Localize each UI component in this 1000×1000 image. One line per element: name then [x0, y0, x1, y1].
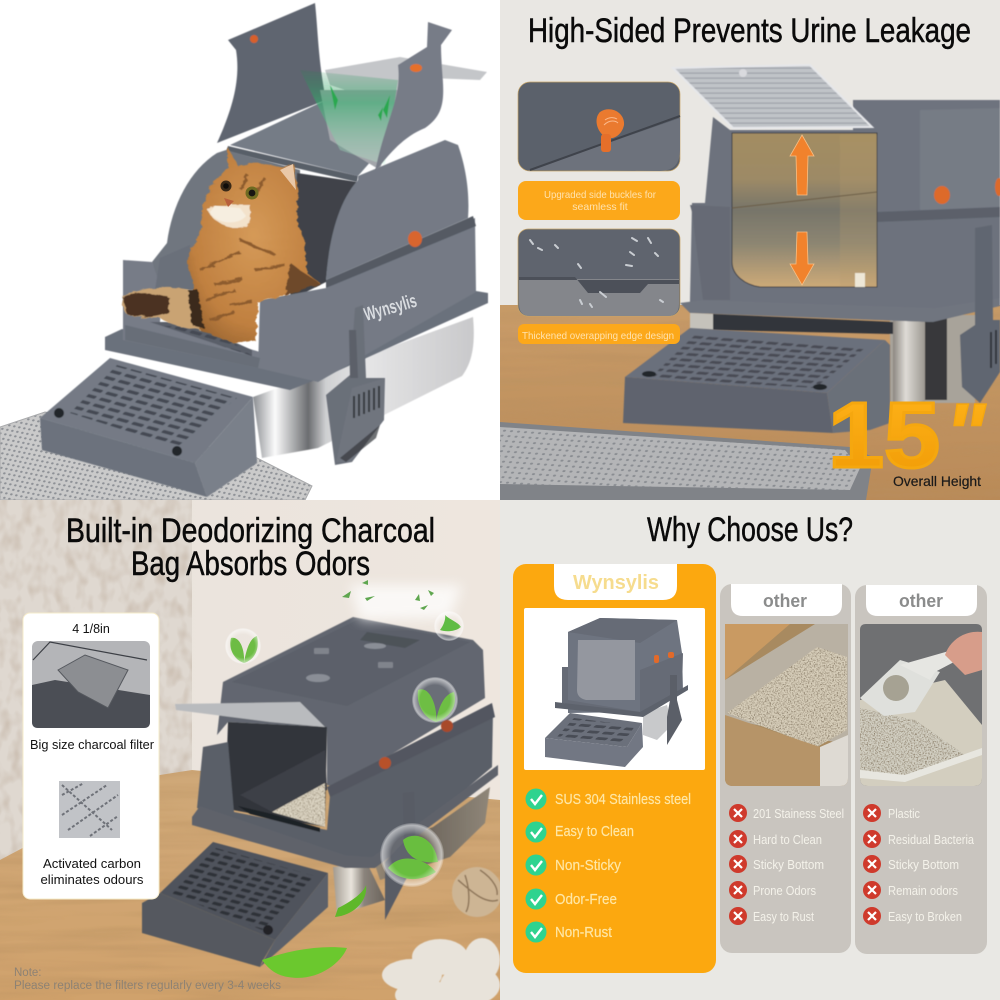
panel: product hero with cat — [0, 0, 500, 500]
height callout: " — [945, 387, 987, 482]
air rising from vent — [342, 580, 462, 620]
brand tab — [554, 564, 677, 600]
panel: why choose us — [500, 500, 1000, 1000]
orange label: side buckles: Upgraded side buckles for — [544, 189, 656, 201]
product photo — [524, 608, 705, 770]
benefit list: Non-Rust — [555, 925, 612, 941]
steel pan photo — [725, 624, 848, 786]
panel: deodorizing charcoal — [0, 500, 502, 1000]
brand name on box: Wynsylis — [362, 291, 419, 326]
height arrows — [790, 135, 814, 285]
tab — [866, 585, 977, 616]
carbon caption: Activated carbon — [43, 856, 141, 871]
carbon bag — [59, 781, 120, 838]
floor mat — [500, 422, 873, 500]
orange label: edge design — [518, 324, 680, 344]
heading — [66, 512, 435, 583]
covered litter box body — [105, 140, 488, 390]
heading: Bag Absorbs Odors — [131, 545, 370, 583]
open lid with wings — [217, 3, 487, 182]
card: Wynsylis — [513, 564, 716, 973]
orange label: side buckles — [518, 181, 680, 220]
plastic tray photo — [860, 624, 982, 786]
floor mat — [0, 412, 312, 500]
panel: high-sided prevents leakage — [500, 0, 1000, 500]
tab — [731, 584, 842, 616]
card: other 1 — [720, 584, 851, 953]
filter caption: Big size charcoal filter — [30, 737, 155, 752]
heading: Built-in Deodorizing Charcoal — [66, 512, 435, 550]
flaw list: Residual Bacteria — [888, 833, 974, 847]
height callout — [828, 383, 987, 489]
flaw list: 201 Stainess Steel — [753, 807, 844, 821]
flaw list — [729, 804, 844, 925]
brand tab: Wynsylis — [573, 572, 659, 594]
wood floor — [500, 305, 1000, 500]
tab: other — [899, 591, 943, 611]
pull-out entry step — [40, 358, 257, 497]
card: other 2 — [855, 585, 987, 954]
size label: 4 1/8in — [72, 622, 110, 636]
benefit list — [526, 788, 691, 942]
flaw list — [863, 804, 974, 925]
info card — [23, 613, 159, 899]
cat — [122, 147, 320, 343]
benefit list: SUS 304 Stainless steel — [555, 792, 691, 808]
detail card: side buckle — [518, 82, 680, 171]
height callout: Overall Height — [893, 473, 981, 489]
benefit list: Non-Sticky — [555, 858, 622, 874]
carbon caption: eliminates odours — [40, 872, 144, 887]
white flower rug — [382, 938, 500, 1000]
orange label: edge design: Thickened overapping edge design — [522, 330, 674, 342]
tab: other — [763, 591, 807, 611]
entry step — [623, 328, 890, 433]
flaw list: Sticky Bottom — [888, 858, 959, 872]
carbon caption — [40, 856, 144, 887]
flaw list: Sticky Bottom — [753, 858, 824, 872]
flaw list: Easy to Broken — [888, 910, 962, 924]
litter box front view — [680, 100, 1000, 403]
flaw list: Hard to Clean — [753, 833, 822, 847]
entry step — [142, 842, 328, 967]
note — [14, 967, 281, 992]
note: Note: — [14, 967, 42, 979]
benefit list: Odor-Free — [555, 892, 617, 908]
flaw list: Easy to Rust — [753, 910, 814, 924]
heading: Why Choose Us? — [647, 511, 853, 549]
detail card: overlapping edge — [518, 229, 680, 316]
wood floor — [0, 770, 500, 1000]
closed litter box — [175, 617, 498, 920]
flaw list: Plastic — [888, 807, 920, 821]
benefit list: Easy to Clean — [555, 824, 634, 840]
note: Please replace the filters regularly every 3-4 weeks — [14, 980, 281, 992]
curtain — [0, 500, 192, 865]
green leaves — [225, 611, 464, 978]
flaw list: Prone Odors — [753, 884, 816, 898]
clear flap — [673, 65, 872, 128]
flaw list: Remain odors — [888, 884, 958, 898]
filter photo — [32, 641, 150, 728]
wool ball — [452, 867, 502, 917]
stainless steel base — [253, 317, 474, 458]
height callout: 15 — [828, 383, 940, 487]
litter scoop — [326, 305, 385, 465]
orange label: side buckles: seamless fit — [572, 201, 628, 213]
